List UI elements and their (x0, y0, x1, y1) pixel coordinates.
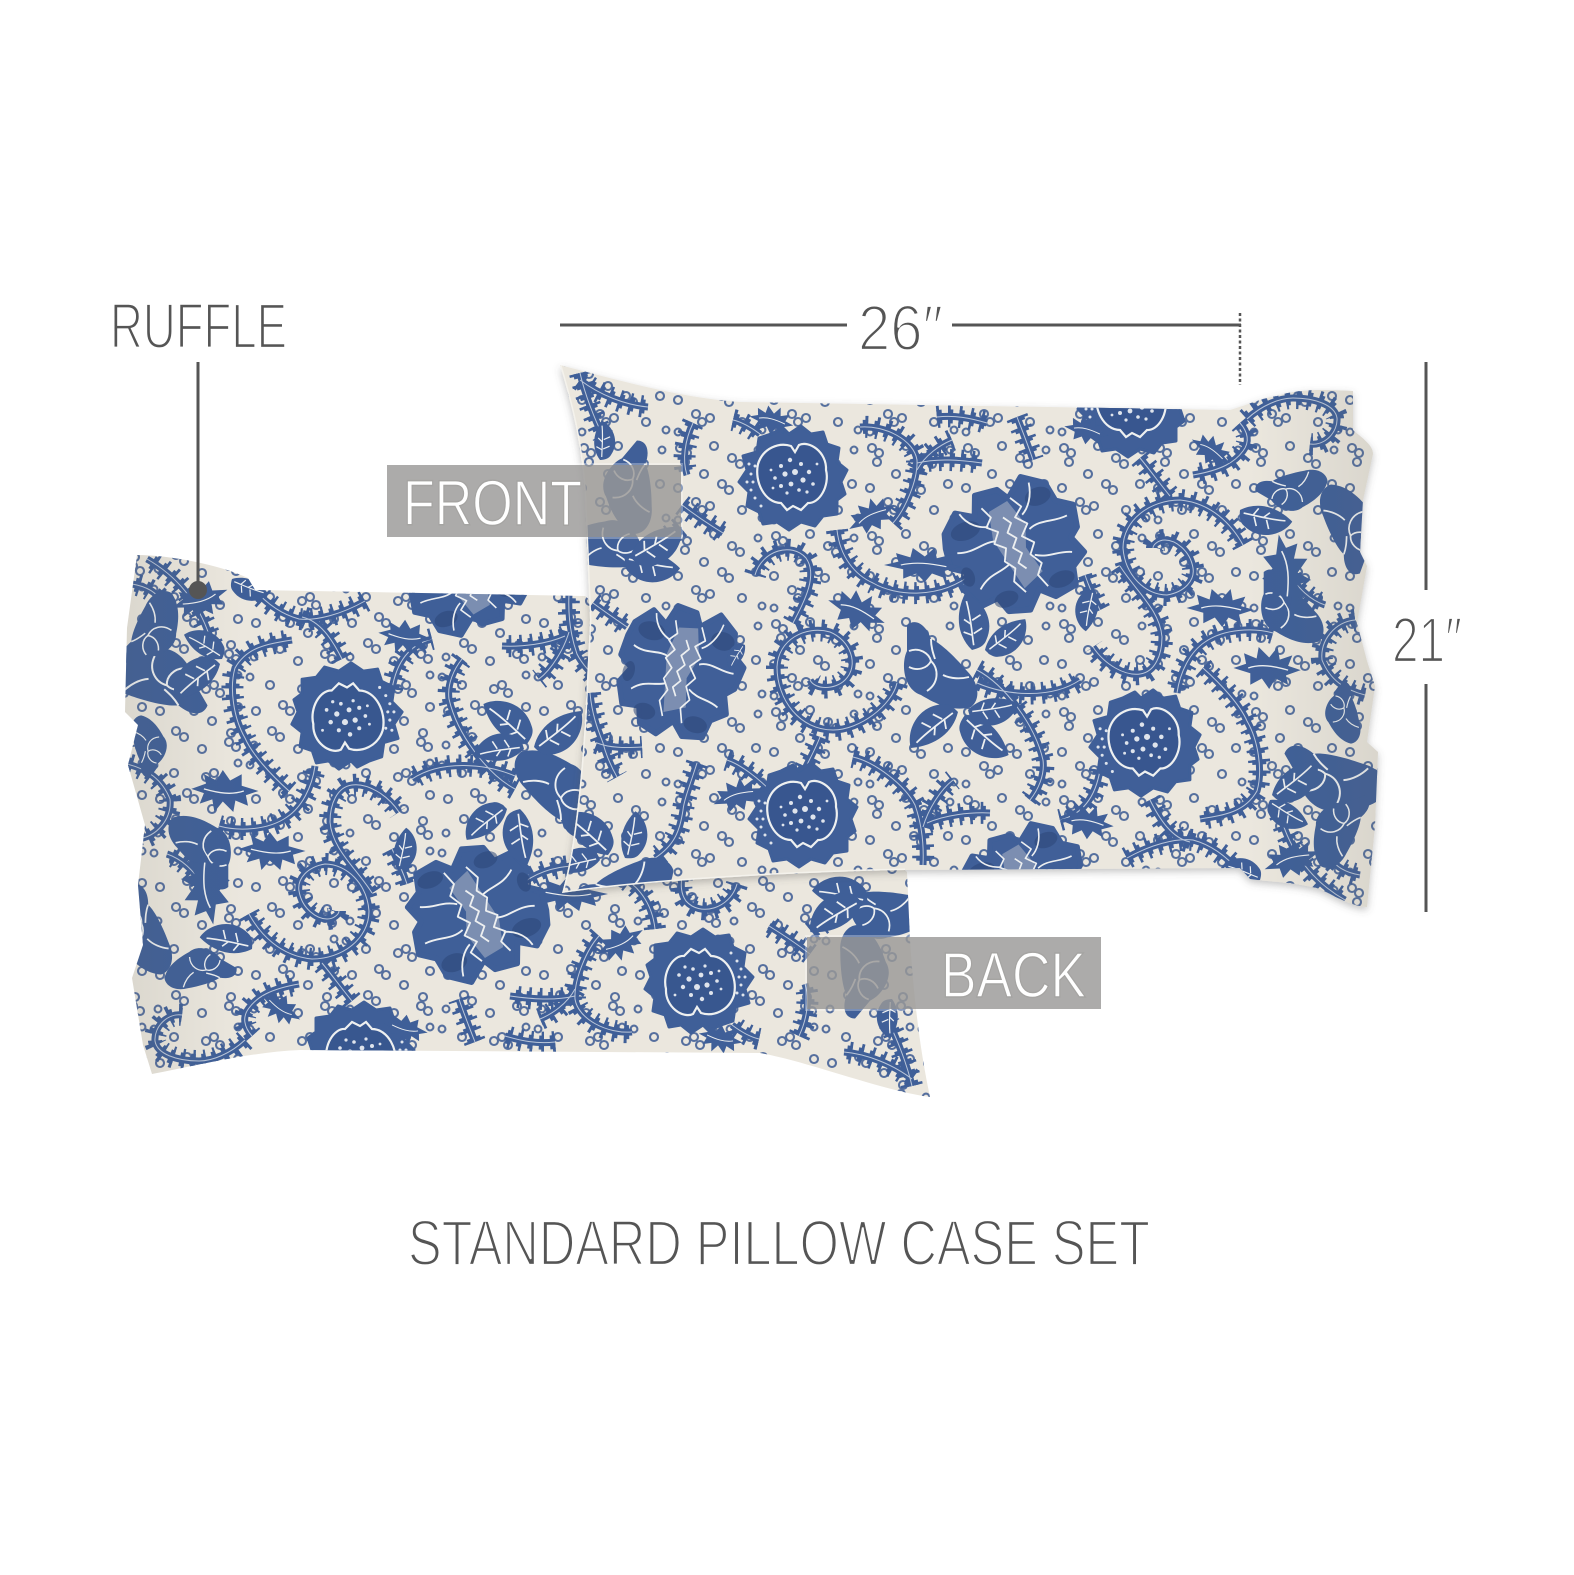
dimension: height 21 inches: 21″ (1392, 604, 1462, 676)
dimension: width 26 inches: 26″ (858, 292, 943, 364)
label: BACK (805, 935, 1103, 1011)
label: BACK: BACK (941, 939, 1086, 1011)
callout: ruffle: RUFFLE (110, 290, 287, 362)
label: FRONT: FRONT (403, 467, 582, 539)
caption: STANDARD PILLOW CASE SET (408, 1207, 1150, 1279)
pillow case: back (125, 555, 930, 1097)
callout: ruffle (110, 290, 287, 599)
pillow case: front (558, 365, 1382, 914)
